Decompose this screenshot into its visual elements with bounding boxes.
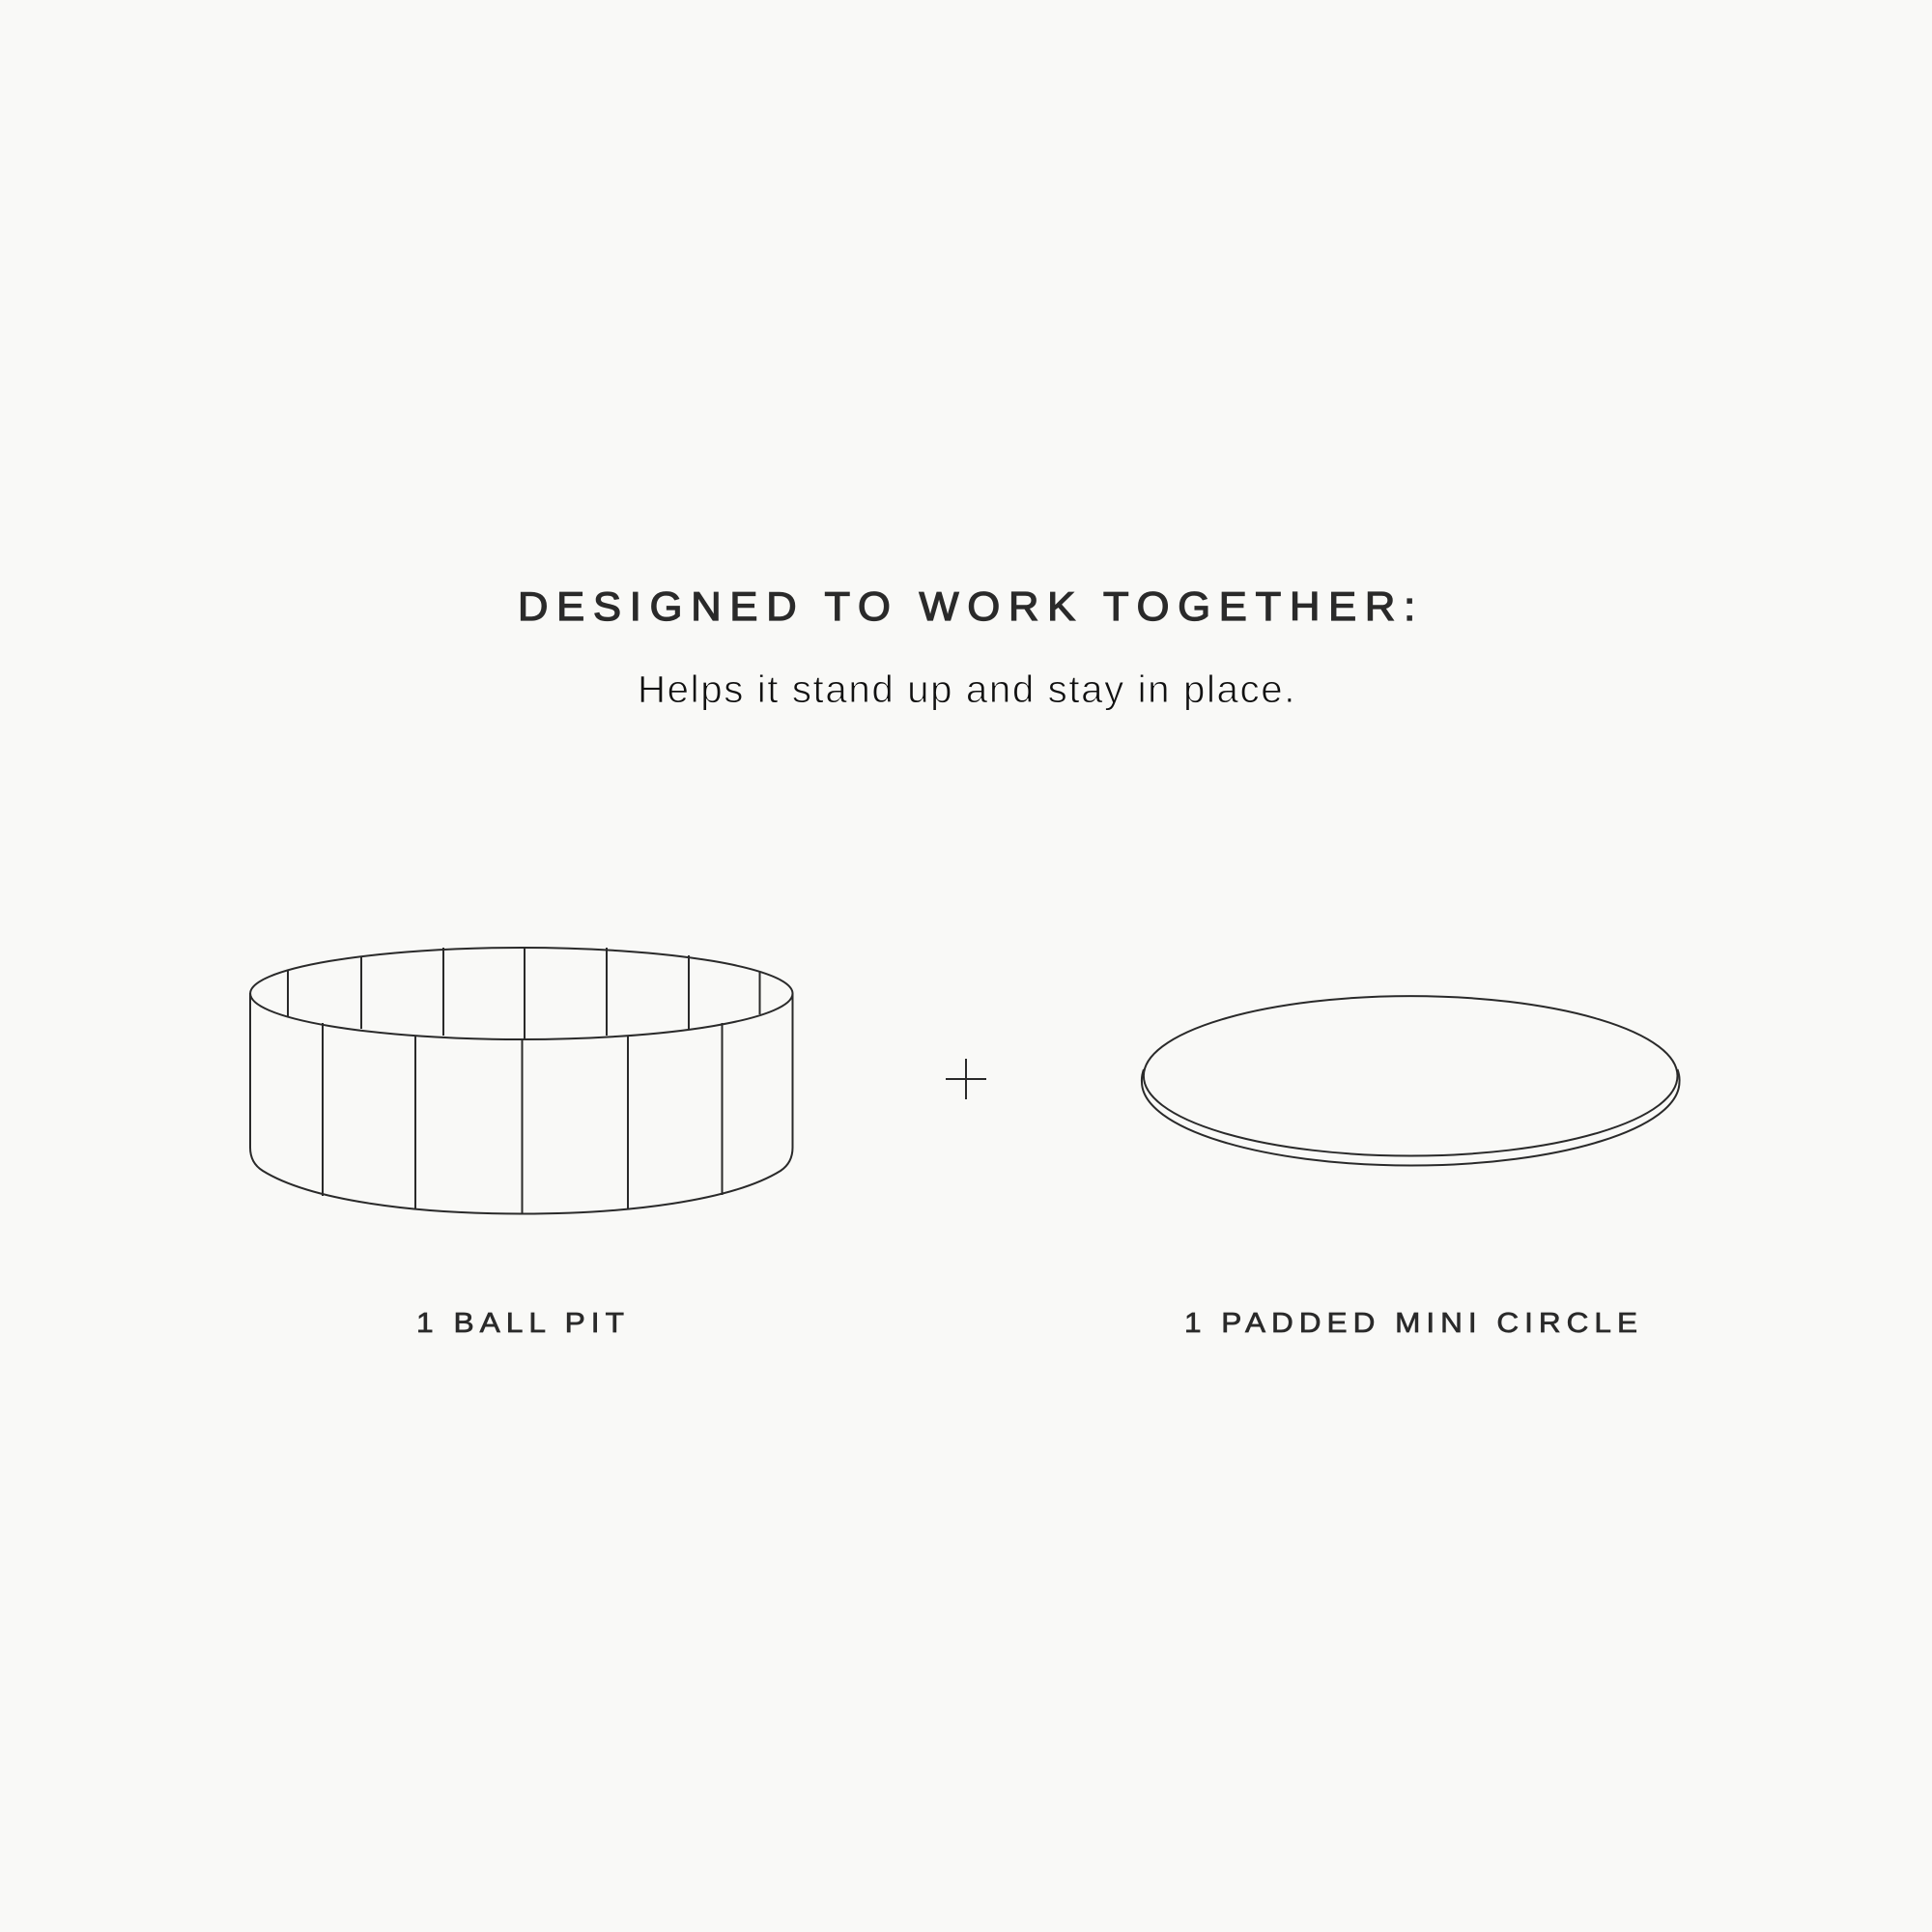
ball pit rim	[250, 948, 792, 1039]
ball pit outer seams	[323, 1023, 723, 1213]
icon: padded mini circle	[1142, 996, 1680, 1165]
icon: ball pit	[250, 948, 792, 1213]
icon: plus sign	[946, 1059, 986, 1099]
circle top surface	[1144, 996, 1677, 1156]
label: ball pit: 1 BALL PIT	[416, 1308, 630, 1339]
subtitle: Helps it stand up and stay in place.	[638, 668, 1296, 711]
ball pit outer wall	[250, 993, 792, 1213]
circle lower edge	[1142, 1069, 1680, 1165]
title: DESIGNED TO WORK TOGETHER:	[518, 583, 1424, 629]
ball pit inner seams	[288, 948, 759, 1039]
label: padded mini circle: 1 PADDED MINI CIRCLE	[1184, 1308, 1643, 1339]
